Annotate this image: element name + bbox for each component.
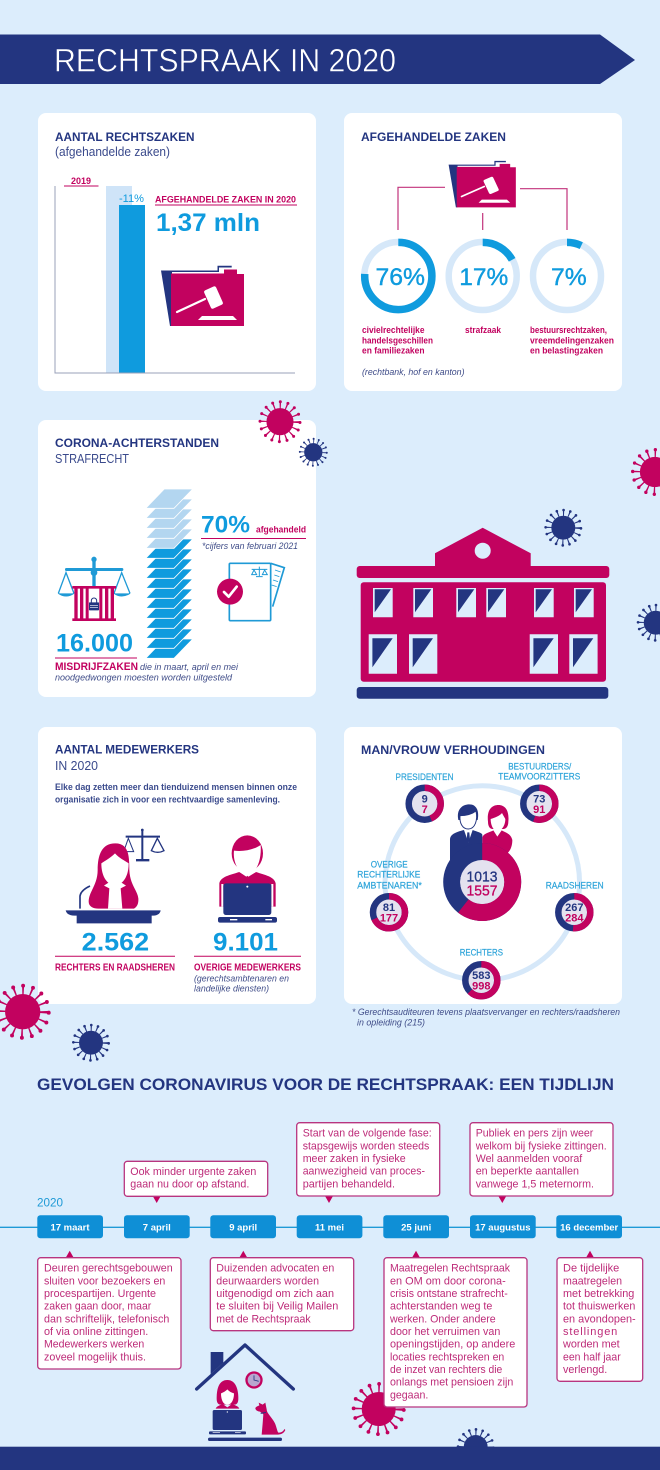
callout: 16 december <box>557 1251 643 1381</box>
label: overige rechterlijke ambtenaren: RECHTERLIJKE <box>357 870 420 881</box>
callout: 11 mei: meer zaken in fysieke <box>303 1153 406 1165</box>
intro text: Elke dag zetten meer dan tienduizend mensen binnen onze <box>55 782 297 793</box>
footer bar <box>0 1447 660 1470</box>
value: 1,37 mln <box>156 209 260 237</box>
donut: raadsheren: 267 <box>565 902 583 914</box>
callout: 16 december: stellingen <box>563 1326 617 1338</box>
donut: overige rechterlijke ambtenaren <box>373 896 405 928</box>
label: bestuursrechtzaken: en belastingzaken <box>530 346 603 357</box>
callout: 17 maart: dan schriftelijk, telefonisch <box>44 1313 169 1325</box>
icon: virus <box>638 605 660 640</box>
callout: 25 juni: Maatregelen Rechtspraak <box>390 1263 510 1275</box>
date: 25 juni <box>383 1215 449 1238</box>
donut: 7% <box>533 242 601 310</box>
callout: 16 december: maatregelen <box>563 1275 622 1287</box>
icon: virus <box>354 1384 404 1434</box>
label: overige medewerkers <box>194 956 301 994</box>
icon: folder with gavel <box>161 266 244 326</box>
callout: 16 december: worden met <box>562 1339 620 1351</box>
label: civielrechtelijke <box>362 325 433 357</box>
subheading: STRAFRECHT <box>55 451 129 466</box>
callout: 11 mei <box>297 1123 440 1203</box>
icon: scales with locked bars <box>58 557 130 621</box>
subheading: (afgehandelde zaken) <box>55 144 170 159</box>
donut: overige rechterlijke ambtenaren: 81 <box>383 902 395 914</box>
date: 25 juni: 25 juni <box>401 1222 431 1233</box>
icon: employee with laptop <box>218 835 277 923</box>
timeline axis <box>0 1215 660 1238</box>
bar chart: -11% <box>119 193 144 205</box>
panel: man/vrouw verhoudingen <box>344 727 622 1004</box>
callout: 25 juni: achterstanden weg te <box>390 1301 492 1313</box>
donut: 17%: 17% <box>459 264 508 291</box>
donut: total <box>452 852 513 912</box>
value: 70% afgehandeld <box>201 511 306 538</box>
callout: 17 maart: zaken gaan door, maar <box>44 1301 152 1313</box>
callout: 16 december: De tijdelijke <box>563 1263 619 1275</box>
caption: misdrijfzaken: MISDRIJFZAKEN <box>55 661 138 673</box>
date: 11 mei <box>297 1215 362 1238</box>
callout: 9 april: met de Rechtspraak <box>216 1313 311 1325</box>
callout: 17 maart: sluiten voor bezoekers en <box>44 1275 165 1287</box>
callout: 25 juni: en OM om door corona- <box>390 1275 506 1287</box>
panel: afgehandelde zaken <box>344 113 622 391</box>
caption: misdrijfzaken: noodgedwongen moesten worden uitgesteld <box>55 673 233 683</box>
heading: AANTAL RECHTSZAKEN <box>55 130 194 144</box>
callout: 25 juni: de inzet van rechters die <box>390 1364 502 1376</box>
callout: 17 augustus: vanwege 1,5 meternorm. <box>476 1178 594 1190</box>
note: (rechtbank, hof en kanton) <box>362 367 464 377</box>
figures: man and woman <box>450 804 512 872</box>
donut: raadsheren <box>558 896 590 928</box>
icon: virus <box>633 450 660 494</box>
timeline heading: GEVOLGEN CORONAVIRUS VOOR DE RECHTSPRAAK: EEN TIJDLIJN <box>37 1076 614 1094</box>
caption: misdrijfzaken: die in maart, april en mei <box>140 662 239 672</box>
label: overige rechterlijke ambtenaren <box>357 860 422 891</box>
panel: aantal medewerkers <box>38 727 316 1004</box>
donut: bestuurders <box>523 788 555 820</box>
icon: working from home <box>197 1345 293 1441</box>
label: bestuursrechtzaken <box>530 325 614 357</box>
callout: 25 juni: openingstijden, op andere <box>390 1339 515 1351</box>
donut: total: 1013 <box>466 870 498 886</box>
label: strafzaak: strafzaak <box>465 325 502 336</box>
callout: 25 juni: werken. Onder andere <box>389 1313 496 1325</box>
label: overige rechterlijke ambtenaren: AMBTENAREN* <box>357 880 422 891</box>
value: 2.562: 2.562 <box>82 929 149 957</box>
intro text: organisatie zich in voor een rechtvaardige samenleving. <box>55 795 280 806</box>
donut: raadsheren: 284 <box>565 913 584 925</box>
callout: 17 augustus: Wel aanmelden vooraf <box>476 1153 583 1165</box>
donut: presidenten: 9 <box>422 793 428 805</box>
callout: 17 augustus: en beperkte aantallen <box>476 1166 579 1178</box>
donut: 76%: 76% <box>376 264 425 291</box>
callout: 9 april: uitgenodigd om zich aan <box>216 1288 334 1300</box>
heading: AFGEHANDELDE ZAKEN <box>361 130 506 144</box>
callout: 17 maart: Medewerkers werken <box>44 1339 144 1351</box>
callout: 7 april: Ook minder urgente zaken <box>130 1166 256 1178</box>
date: 16 december <box>556 1215 622 1238</box>
label: afgehandelde zaken in 2020: AFGEHANDELDE ZAKEN IN 2020 <box>155 194 296 206</box>
title banner <box>0 34 635 84</box>
callout: 16 december: een half jaar <box>563 1351 621 1363</box>
callout: 16 december: tot thuiswerken <box>563 1301 635 1313</box>
heading: AANTAL MEDEWERKERS <box>55 742 199 756</box>
icon: signed document <box>217 563 284 621</box>
value: 16.000: 16.000 <box>56 630 133 658</box>
label: civielrechtelijke: handelsgeschillen <box>362 335 433 346</box>
callout: 25 juni <box>384 1251 527 1407</box>
callout: 9 april: te sluiten bij Veilig Mailen <box>216 1301 338 1313</box>
label: bestuurders: BESTUURDERS/ <box>508 761 572 772</box>
label: raadsheren: RAADSHEREN <box>546 880 604 891</box>
icon: virus <box>300 439 327 466</box>
callout: 9 april <box>210 1251 354 1331</box>
label: rechters: RECHTERS <box>460 948 503 959</box>
callout: 11 mei: partijen behandeld. <box>303 1178 395 1190</box>
icon: folder with gavel <box>449 161 516 207</box>
callout: 17 maart: of via online zittingen. <box>44 1326 148 1338</box>
heading: MAN/VROUW VERHOUDINGEN <box>361 743 545 757</box>
year label: 2020 <box>37 1196 63 1210</box>
label: bestuursrechtzaken: vreemdelingenzaken <box>530 335 614 346</box>
date: 7 april: 7 april <box>143 1222 171 1233</box>
callout: 16 december: verlengd. <box>563 1364 607 1376</box>
label: overige rechterlijke ambtenaren: OVERIGE <box>371 860 408 871</box>
value: 9.101: 9.101 <box>213 929 278 957</box>
callout: 16 december: en avondopen- <box>563 1313 636 1325</box>
date: 17 augustus: 17 augustus <box>475 1222 531 1233</box>
date: 9 april <box>210 1215 276 1238</box>
callout: 16 december: met betrekking <box>563 1288 634 1300</box>
label: bestuursrechtzaken: bestuursrechtzaken, <box>530 325 607 336</box>
ring <box>385 786 580 980</box>
icon: court building <box>357 528 609 699</box>
donut: presidenten <box>409 788 441 820</box>
callout: 17 augustus: Publiek en pers zijn weer <box>476 1128 594 1140</box>
callout: 17 maart: procespartijen. Urgente <box>44 1288 156 1300</box>
date: 7 april <box>124 1215 190 1238</box>
callout: 17 augustus: welkom bij fysieke zittingen. <box>475 1140 607 1152</box>
panel: aantal rechtszaken <box>38 113 316 391</box>
label: civielrechtelijke: en familiezaken <box>362 346 425 357</box>
icon: virus <box>458 1429 493 1465</box>
donut: 76% <box>364 242 432 310</box>
note: *cijfers van februari 2021 <box>202 541 298 551</box>
value: 70% afgehandeld: afgehandeld <box>256 524 306 536</box>
callout: 11 mei: stapsgewijs worden steeds <box>303 1140 430 1152</box>
donut: overige rechterlijke ambtenaren: 177 <box>380 913 398 925</box>
donut: rechters: 583 <box>472 970 490 982</box>
stack of case files <box>146 489 193 658</box>
callout: 9 april: Duizenden advocaten en <box>216 1263 334 1275</box>
label: rechters en raadsheren <box>55 956 175 974</box>
callout: 11 mei: Start van de volgende fase: <box>303 1128 432 1140</box>
date: 17 maart: 17 maart <box>50 1222 90 1233</box>
label: overige medewerkers: (gerechtsambtenaren en <box>194 973 289 983</box>
callout: 25 juni: gegaan. <box>390 1389 428 1401</box>
heading: CORONA-ACHTERSTANDEN <box>55 436 219 450</box>
callout: 25 juni: onlangs met pensioen zijn <box>390 1377 513 1389</box>
callout: 9 april: deurwaarders worden <box>216 1275 319 1287</box>
intro text <box>55 782 297 806</box>
bar chart <box>55 176 295 373</box>
icon: virus <box>546 510 581 545</box>
callout: 11 mei: aanwezigheid van proces- <box>303 1166 425 1178</box>
donut: 7%: 7% <box>551 264 587 291</box>
callout: 17 maart: Deuren gerechtsgebouwen <box>44 1263 173 1275</box>
donut: rechters: 998 <box>472 981 490 993</box>
date: 16 december: 16 december <box>560 1222 619 1233</box>
callout: 17 maart <box>38 1251 181 1369</box>
callout: 17 augustus <box>470 1123 613 1203</box>
callout: 25 juni: locaties rechtspreken en <box>390 1351 504 1363</box>
callout: 7 april: gaan nu door op afstand. <box>130 1179 249 1191</box>
caption: misdrijfzaken <box>55 661 239 683</box>
icon: judge <box>66 829 164 923</box>
icon: virus <box>73 1025 109 1060</box>
label: bestuurders: TEAMVOORZITTERS <box>498 771 580 782</box>
footnote: in opleiding (215) <box>357 1018 425 1028</box>
icon: virus <box>260 402 300 442</box>
label: civielrechtelijke: civielrechtelijke <box>362 325 424 336</box>
donut: bestuurders: 91 <box>533 804 545 816</box>
value: 70% afgehandeld: 70% <box>201 511 250 538</box>
date: 17 augustus <box>470 1215 536 1238</box>
panel: corona-achterstanden <box>38 420 316 697</box>
donut: 17% <box>449 242 517 310</box>
label: presidenten: PRESIDENTEN <box>396 772 454 783</box>
donut: presidenten: 7 <box>422 804 428 816</box>
donut: bestuurders: 73 <box>533 793 545 805</box>
connectors <box>398 187 567 230</box>
label: bestuurders <box>498 761 580 782</box>
date: 9 april: 9 april <box>229 1222 257 1233</box>
callout: 7 april <box>124 1161 268 1203</box>
label: overige medewerkers: OVERIGE MEDEWERKERS <box>194 963 301 974</box>
bar chart: 2019 <box>71 176 91 187</box>
donut: rechters <box>465 964 497 996</box>
subheading: IN 2020 <box>55 758 98 773</box>
footnote: * Gerechtsauditeuren tevens plaatsvervanger en rechters/raadsheren <box>352 1007 620 1017</box>
donut: total: 1557 <box>466 884 498 900</box>
icon: virus <box>0 986 49 1038</box>
label: overige medewerkers: landelijke diensten) <box>194 984 269 994</box>
label: rechters en raadsheren: RECHTERS EN RAADSHEREN <box>55 963 175 974</box>
callout: 25 juni: crisis ontstane strafrecht- <box>390 1288 508 1300</box>
title banner: RECHTSPRAAK IN 2020 <box>54 42 396 78</box>
footnote <box>352 1007 620 1028</box>
callout: 17 maart: zoveel mogelijk thuis. <box>44 1351 146 1363</box>
date: 17 maart <box>37 1215 103 1238</box>
callout: 25 juni: door het verruimen van <box>390 1326 500 1338</box>
date: 11 mei: 11 mei <box>315 1222 344 1233</box>
